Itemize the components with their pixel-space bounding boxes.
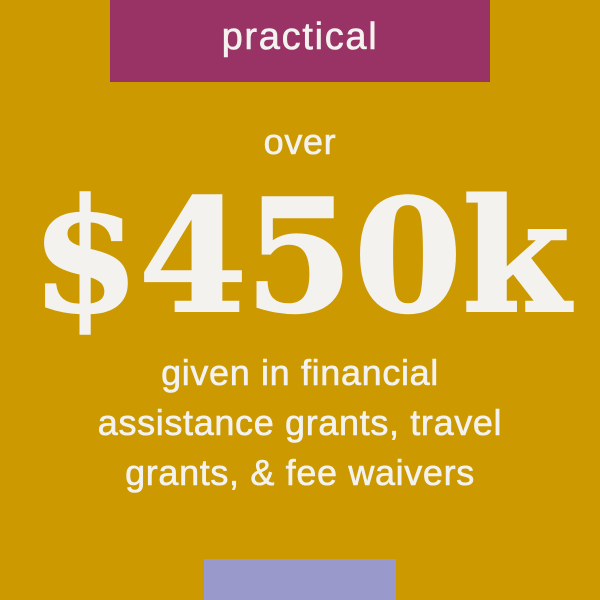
description text: given in financial [161, 352, 439, 393]
big number: $450k: $450k [31, 165, 573, 348]
description text: grants, & fee waivers [125, 452, 475, 493]
description text [98, 352, 502, 493]
description text: assistance grants, travel [98, 402, 502, 443]
bottom lavender block [204, 559, 396, 600]
text: over: over [264, 121, 336, 162]
heading banner: practical: practical [222, 16, 378, 58]
heading banner: practical [110, 0, 490, 82]
